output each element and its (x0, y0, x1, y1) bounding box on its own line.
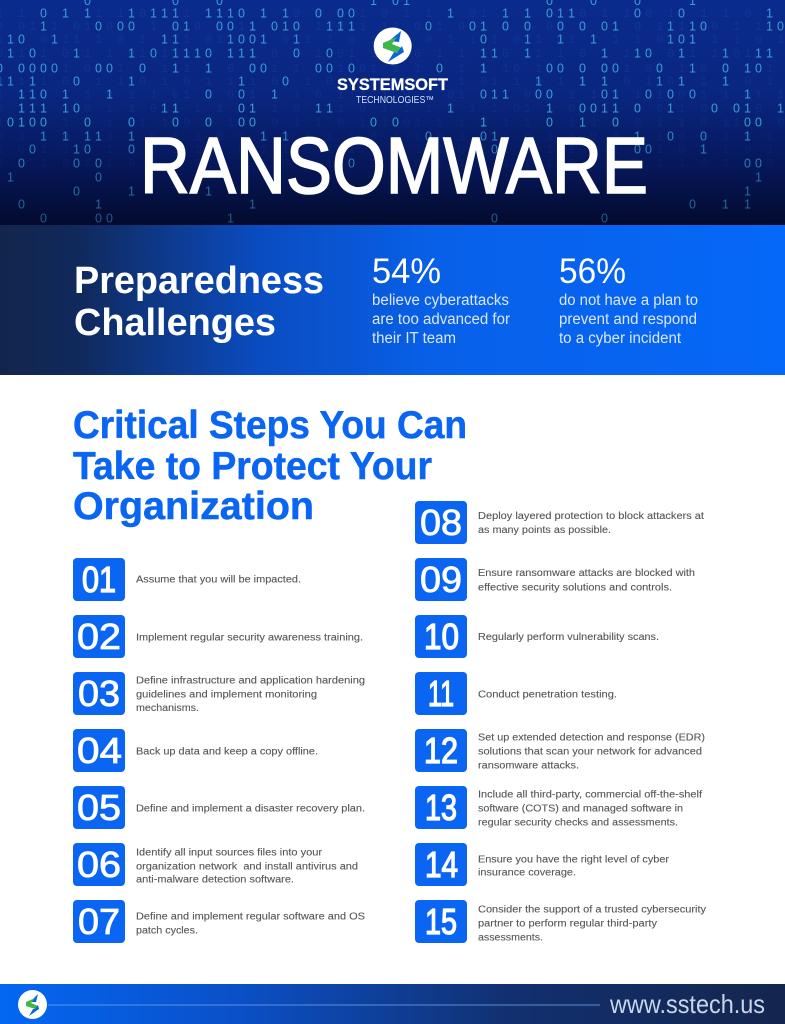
step 14: insurance coverage. (478, 868, 576, 878)
step 07: patch cycles. (136, 926, 198, 936)
footer band (0, 984, 785, 1024)
step 02: 02 (77, 616, 121, 657)
title: RANSOMWARE (140, 121, 648, 210)
step 10: 10 (424, 616, 459, 657)
step 09: Ensure ransomware attacks are blocked with (478, 568, 695, 579)
step 05: Define and implement a disaster recovery plan. (136, 804, 365, 814)
website address: www.sstech.us (609, 989, 765, 1019)
footer logo icon (18, 990, 47, 1019)
logo wordmark: SYSTEMSOFT (337, 76, 448, 94)
header panel with binary code background: 101101110111001111101111 (7, 46, 773, 60)
header panel with binary code background: 1101100101100010001 (18, 88, 751, 102)
step 14: Ensure you have the right level of cyber (478, 854, 670, 866)
step 03: guidelines and implement monitoring (136, 690, 317, 700)
step 03: 03 (78, 673, 120, 714)
panel: preparedness challenges (0, 225, 785, 375)
step 03: mechanisms. (136, 703, 199, 714)
step 15: partner to perform regular third-party (478, 918, 657, 930)
step 10 (415, 615, 659, 658)
step 11 (415, 672, 617, 715)
step 06 (73, 843, 358, 886)
step 08 (415, 501, 704, 544)
header panel with binary code background: 000000001100000010000001010 (0, 62, 762, 76)
step 13: software (COTS) and managed software in (478, 804, 683, 814)
statistic: 54%: are too advanced for (372, 311, 510, 328)
step 04: Back up data and keep a copy offline. (136, 746, 318, 758)
step 15: Consider the support of a trusted cybersecurity (478, 904, 706, 916)
step 14: 14 (425, 844, 458, 885)
step 08: 08 (420, 502, 462, 543)
header panel with binary code background: 10111100110111101 (7, 32, 696, 46)
step 10: Regularly perform vulnerability scans. (478, 632, 659, 643)
header panel with binary code background: 000000 (18, 156, 762, 170)
header panel with binary code background: 0111 (73, 184, 751, 198)
statistic: 56% (559, 252, 698, 347)
step 09: 09 (420, 559, 462, 600)
step 12: solutions that scan your network for advanced (478, 746, 702, 758)
step 03 (73, 672, 365, 715)
heading: critical steps: Organization (73, 485, 314, 528)
step 13: Include all third-party, commercial off-the-shelf (478, 790, 702, 800)
step 02 (73, 615, 363, 658)
statistic: 54% (372, 252, 510, 347)
header panel with binary code background: 11110110111110011010011 (18, 102, 784, 116)
step 02: Implement regular security awareness training. (136, 632, 363, 644)
step 11: 11 (428, 673, 454, 714)
step 12 (415, 729, 705, 772)
step 09 (415, 558, 695, 601)
statistic: 54%: their IT team (372, 330, 456, 347)
step 04 (73, 729, 318, 772)
step 08: Deploy layered protection to block attackers at (478, 511, 704, 522)
step 13: 13 (425, 787, 457, 828)
header panel with binary code background: 1110110111111 (0, 74, 729, 88)
step 12: ransomware attacks. (478, 760, 579, 772)
step 01: Assume that you will be impacted. (136, 574, 301, 586)
step 12: 12 (424, 730, 458, 771)
step 13: regular security checks and assessments. (478, 818, 678, 828)
step 06: Identify all input sources files into your (136, 848, 323, 858)
header panel with binary code background: 000100 (40, 212, 608, 226)
logo wordmark: TECHNOLOGIES™ (356, 95, 434, 106)
step 07: 07 (78, 901, 120, 942)
step 15: assessments. (478, 932, 543, 944)
step 07: Define and implement regular software and OS (136, 912, 365, 922)
header panel with binary code background (0, 0, 785, 226)
step 14 (415, 843, 670, 886)
step 11: Conduct penetration testing. (478, 690, 617, 700)
step 06: anti-malware detection software. (136, 874, 294, 886)
step 15: 15 (425, 901, 457, 942)
step 06: organization network and install antivirus and (136, 862, 358, 872)
step 15 (415, 900, 706, 944)
step 08: as many points as possible. (478, 525, 611, 536)
header panel with binary code background: 010000000000101000 (7, 116, 762, 130)
header panel with binary code background: 011011 (18, 198, 751, 212)
step 01 (73, 558, 301, 601)
statistic: 56%: prevent and respond (559, 311, 697, 328)
statistic: 54%: 54% (372, 252, 441, 291)
heading: critical steps (73, 404, 467, 528)
header panel with binary code background: 101 (7, 170, 762, 184)
heading: critical steps: Take to Protect Your (73, 445, 432, 488)
statistic: 56%: do not have a plan to (559, 292, 698, 309)
step 04: 04 (77, 730, 122, 771)
header panel with binary code background: 01000001 (29, 142, 707, 156)
step 03: Define infrastructure and application hardening (136, 676, 365, 686)
logo: SystemSoft emblem (374, 28, 412, 64)
step 01: 01 (82, 559, 116, 600)
header panel with binary code background: 0111111111011000111011001 (40, 6, 773, 20)
step 06: 06 (77, 844, 121, 885)
step 13 (415, 786, 702, 829)
step 12: Set up extended detection and response (EDR) (478, 732, 705, 744)
step 05 (73, 786, 365, 829)
step 07 (73, 900, 365, 943)
heading: preparedness challenges (74, 260, 324, 344)
logo wordmark (337, 76, 448, 106)
step 09: effective security solutions and controls. (478, 582, 672, 594)
heading: preparedness challenges: Preparedness (74, 260, 324, 302)
header panel with binary code background: 10000100101011100100000111010 (40, 20, 784, 34)
header panel with binary code background: 11111110011001 (40, 130, 751, 144)
heading: critical steps: Critical Steps You Can (73, 404, 467, 447)
statistic: 56%: 56% (559, 252, 626, 291)
statistic: 56%: to a cyber incident (559, 330, 682, 347)
step 05: 05 (77, 787, 121, 828)
heading: preparedness challenges: Challenges (74, 302, 276, 344)
statistic: 54%: believe cyberattacks (372, 292, 509, 309)
